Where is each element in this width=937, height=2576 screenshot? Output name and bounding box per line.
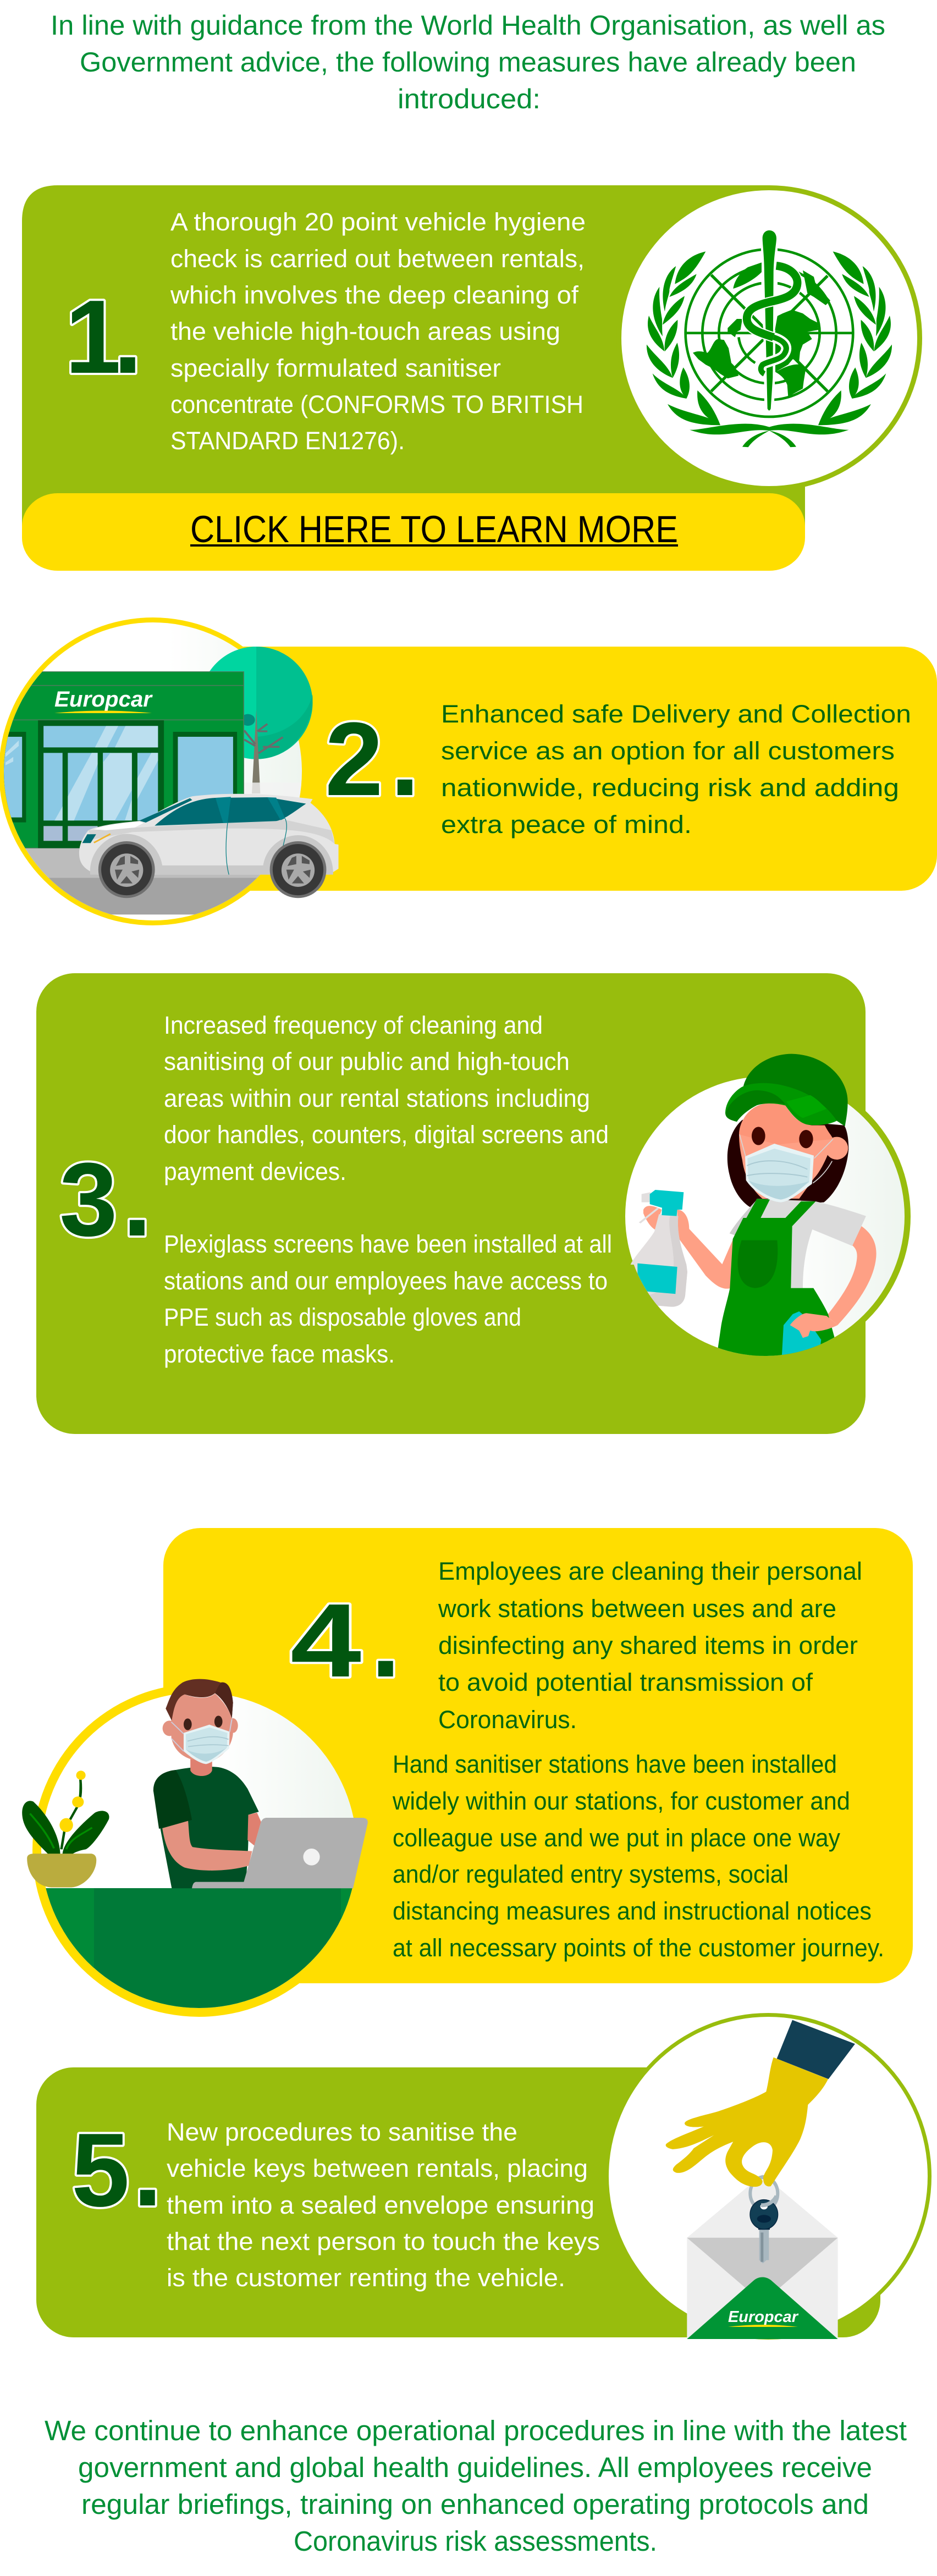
step 2 text: service as an option for all customers bbox=[441, 737, 895, 765]
number 4: . bbox=[371, 1582, 400, 1699]
step 4 text, first paragraph: Employees are cleaning their personal bbox=[438, 1557, 862, 1585]
step 1 text: specially formulated sanitiser bbox=[170, 354, 501, 382]
number 4 bbox=[290, 1582, 400, 1699]
intro text: In line with guidance from the World Health Organisation, as well as bbox=[51, 10, 885, 41]
number 4: 4 bbox=[290, 1582, 361, 1699]
number 1: 1 bbox=[65, 279, 123, 395]
panel: step 4 bbox=[22, 1528, 913, 2020]
step 1 text: check is carried out between rentals, bbox=[170, 245, 585, 273]
step 2 text: Enhanced safe Delivery and Collection bbox=[441, 700, 911, 728]
step 3 text, first paragraph: Increased frequency of cleaning and bbox=[164, 1011, 543, 1039]
closing text: regular briefings, training on enhanced operating protocols and bbox=[81, 2489, 869, 2520]
step 1 text: the vehicle high-touch areas using bbox=[170, 317, 560, 345]
step 2 text: extra peace of mind. bbox=[441, 810, 692, 839]
number 3: 3 bbox=[59, 1141, 118, 1258]
step 4 text, second paragraph: widely within our stations, for customer and bbox=[392, 1787, 850, 1815]
step 3 text, first paragraph: door handles, counters, digital screens and bbox=[164, 1121, 609, 1149]
number 1: . bbox=[113, 279, 142, 395]
desk bbox=[46, 1888, 352, 2008]
illustration: cleaner with spray bottle bbox=[619, 1054, 911, 1369]
step 4 text, second paragraph: Hand sanitiser stations have been installed bbox=[393, 1750, 837, 1778]
button: click here to learn more bbox=[22, 493, 805, 571]
number 3: . bbox=[123, 1141, 152, 1258]
panel background bbox=[36, 2067, 880, 2337]
step 4 text, second paragraph: at all necessary points of the customer journey. bbox=[393, 1934, 884, 1962]
step 3 text, second paragraph: PPE such as disposable gloves and bbox=[164, 1303, 521, 1331]
step 4 text, second paragraph: distancing measures and instructional notices bbox=[393, 1897, 872, 1925]
panel background bbox=[165, 647, 937, 891]
illustration: gloved hand, key and envelope bbox=[605, 2013, 932, 2340]
step 1 text: concentrate (CONFORMS TO BRITISH bbox=[170, 390, 583, 418]
step 3 text, first paragraph: sanitising of our public and high-touch bbox=[164, 1047, 570, 1075]
step 3 text, first paragraph: payment devices. bbox=[164, 1157, 346, 1185]
number 3 bbox=[59, 1141, 152, 1258]
step 4 text, first paragraph: disinfecting any shared items in order bbox=[438, 1631, 858, 1659]
step 5 text: vehicle keys between rentals, placing bbox=[167, 2154, 588, 2182]
step 3 text, second paragraph: protective face masks. bbox=[164, 1340, 395, 1368]
step 3 text, second paragraph: Plexiglass screens have been installed at all bbox=[164, 1230, 612, 1258]
number 5 bbox=[71, 2111, 162, 2229]
step 4 text, first paragraph: to avoid potential transmission of bbox=[438, 1668, 813, 1696]
icon: WHO emblem in circle bbox=[616, 185, 922, 491]
Europcar sign: Europcar bbox=[54, 687, 153, 711]
closing text: We continue to enhance operational procedures in line with the latest bbox=[45, 2415, 907, 2446]
step 3 text, first paragraph: areas within our rental stations including bbox=[164, 1084, 590, 1112]
illustration: Europcar store and car bbox=[0, 617, 339, 925]
panel: step 5 bbox=[36, 2013, 932, 2340]
step 5 text: that the next person to touch the keys bbox=[167, 2227, 600, 2255]
step 4 text, second paragraph bbox=[392, 1750, 884, 1962]
step 5 text: New procedures to sanitise the bbox=[167, 2118, 517, 2146]
step 1 text: A thorough 20 point vehicle hygiene bbox=[170, 208, 586, 236]
store and ground bbox=[0, 672, 332, 914]
Europcar logo on envelope: Europcar bbox=[728, 2308, 799, 2326]
step 4 text, first paragraph bbox=[438, 1557, 862, 1734]
illustration: masked employee at desk bbox=[22, 1679, 368, 2020]
closing text: government and global health guidelines. All employees receive bbox=[78, 2452, 872, 2483]
step 1 text: which involves the deep cleaning of bbox=[170, 281, 579, 309]
panel: step 2 bbox=[0, 617, 937, 925]
number 2: 2 bbox=[325, 701, 383, 818]
number 5: . bbox=[133, 2111, 162, 2228]
panel: step 1 bbox=[22, 185, 922, 571]
step 2 text bbox=[441, 700, 911, 839]
step 3 text, first paragraph bbox=[164, 1011, 609, 1185]
panel background bbox=[22, 185, 805, 528]
step 1 text bbox=[170, 208, 586, 455]
step 2 text: nationwide, reducing risk and adding bbox=[441, 774, 899, 802]
panel background bbox=[36, 973, 866, 1434]
step 5 text: is the customer renting the vehicle. bbox=[167, 2264, 565, 2292]
panel: step 3 bbox=[36, 973, 911, 1434]
step 4 text, second paragraph: and/or regulated entry systems, social bbox=[393, 1860, 789, 1888]
step 5 text: them into a sealed envelope ensuring bbox=[167, 2191, 594, 2219]
step 1 text: STANDARD EN1276). bbox=[170, 427, 405, 455]
number 2: . bbox=[390, 701, 420, 818]
number 5: 5 bbox=[71, 2112, 130, 2229]
closing text: Coronavirus risk assessments. bbox=[294, 2525, 657, 2557]
panel background bbox=[163, 1528, 913, 1983]
step 3 text, second paragraph: stations and our employees have access to bbox=[164, 1267, 608, 1295]
step 4 text, first paragraph: work stations between uses and are bbox=[438, 1595, 836, 1623]
step 4 text, second paragraph: colleague use and we put in place one way bbox=[393, 1824, 840, 1852]
intro text: Government advice, the following measures have already been bbox=[80, 47, 856, 78]
intro text bbox=[51, 10, 885, 114]
step 4 text, first paragraph: Coronavirus. bbox=[438, 1706, 577, 1734]
step 5 text bbox=[167, 2118, 600, 2292]
number 2 bbox=[325, 701, 420, 818]
closing text bbox=[45, 2415, 907, 2557]
icon: tree bbox=[200, 647, 313, 793]
icon: car bbox=[79, 794, 339, 898]
step 3 text, second paragraph bbox=[164, 1230, 612, 1368]
intro text: introduced: bbox=[398, 84, 541, 114]
button: click here to learn more: CLICK HERE TO LEARN MORE bbox=[190, 508, 678, 550]
